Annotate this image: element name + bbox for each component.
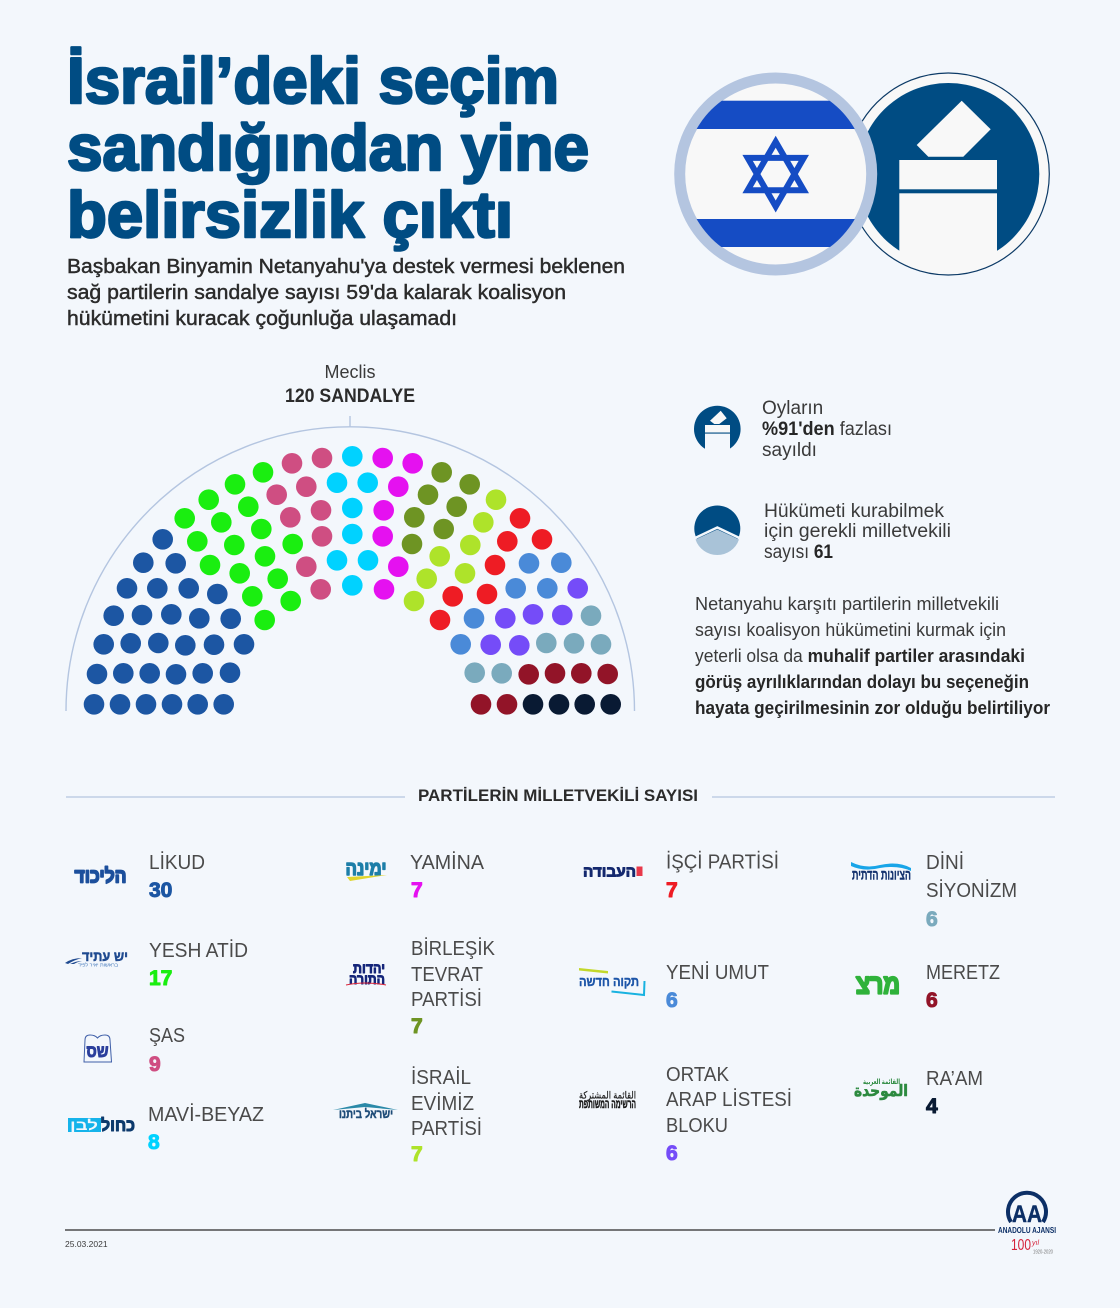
party: Labor: 7: [666, 879, 678, 902]
logo: Yamina: ימינה: [346, 858, 386, 880]
stat: votes counted: [762, 398, 892, 461]
party: Yisrael Beytenu: İSRAİL: [411, 1066, 471, 1089]
party: Meretz: [856, 962, 1000, 1012]
party: Ra'am: 4: [926, 1095, 938, 1118]
parliament label: [285, 362, 415, 407]
seats: Yesh Atid 17: [174, 462, 303, 630]
stat: votes counted: Oyların: [762, 398, 823, 419]
seats: Labor 7: [430, 508, 552, 630]
seats: Likud 30: [84, 529, 254, 715]
logo: United Torah Judaism: התורה: [349, 971, 385, 987]
title: [67, 44, 589, 251]
party: Joint List: 6: [666, 1142, 678, 1165]
stat: votes counted: sayıldı: [762, 440, 817, 461]
party: New Hope: YENİ UMUT: [666, 961, 769, 984]
icon: ballot box circle: [847, 73, 1049, 275]
party: New Hope: 6: [666, 989, 678, 1012]
party: Blue and White: MAVİ-BEYAZ: [148, 1103, 264, 1126]
party: Shas: 9: [149, 1053, 161, 1076]
logo: Anadolu Ajansi: yıl: [1031, 1240, 1039, 1247]
logo: United Torah Judaism: יהדות: [353, 960, 385, 976]
analysis paragraph: yeterli olsa da muhalif partiler arasındaki: [695, 646, 1025, 666]
party: Religious Zionism: [851, 851, 1017, 931]
icon: Israeli flag circle: [680, 78, 872, 270]
logo: Anadolu Ajansi: [998, 1193, 1056, 1256]
logo: Yisrael Beytenu: ישראל ביתנו: [339, 1107, 393, 1121]
title: belirsizlik çıktı: [67, 178, 513, 251]
subtitle: [67, 256, 625, 330]
party: Shas: ŞAS: [149, 1025, 185, 1047]
hemicycle seat chart: [66, 416, 634, 715]
party: United Torah Judaism: 7: [411, 1015, 423, 1038]
party: Ra'am: [854, 1068, 983, 1118]
subtitle: Başbakan Binyamin Netanyahu'ya destek vermesi beklenen: [67, 256, 625, 278]
party: Blue and White: 8: [148, 1131, 160, 1154]
stat: seats required: Hükümeti kurabilmek: [764, 501, 944, 522]
analysis paragraph: hayata geçirilmesinin zor olduğu belirtiliyor: [695, 698, 1050, 718]
footer rule and date: 25.03.2021: [65, 1239, 108, 1249]
logo: Likud: הליכוד: [74, 866, 126, 888]
logo: Religious Zionism: הציונות הדתית: [852, 866, 911, 882]
party: Yesh Atid: 17: [149, 967, 172, 990]
title: İsrail’deki seçim: [67, 44, 559, 117]
party: Likud: LİKUD: [149, 851, 205, 874]
stat: seats required: sayısı 61: [764, 542, 833, 563]
party: Meretz: MERETZ: [926, 962, 1000, 984]
subtitle: hükümetini kuracak çoğunluğa ulaşamadı: [67, 308, 457, 330]
party: Labor: İŞÇİ PARTİSİ: [666, 850, 779, 874]
party: Joint List: [579, 1064, 792, 1165]
party: United Torah Judaism: [346, 937, 496, 1038]
party: Yesh Atid: YESH ATİD: [149, 939, 248, 962]
seats: Religious Zionism 6: [464, 605, 611, 684]
party: Yisrael Beytenu: EVİMİZ: [411, 1092, 474, 1115]
seats: Shas 9: [266, 448, 332, 600]
icon: majority hemicycle: [693, 506, 742, 555]
party: Joint List: ARAP LİSTESİ: [666, 1088, 792, 1111]
logo: New Hope: [579, 968, 644, 995]
logo: Anadolu Ajansi: AA: [1012, 1201, 1042, 1228]
party: Ra'am: RA’AM: [926, 1068, 983, 1090]
logo: Anadolu Ajansi: 1920-2020: [1033, 1250, 1053, 1256]
subtitle: sağ partilerin sandalye sayısı 59'da kalarak koalisyon: [67, 282, 566, 304]
logo: Blue and White: [68, 1116, 135, 1135]
seats: United Torah Judaism 7: [402, 462, 480, 554]
party: Joint List: ORTAK: [666, 1064, 730, 1086]
party: Religious Zionism: 6: [926, 908, 938, 931]
seats: Yamina 7: [372, 448, 423, 600]
logo: Anadolu Ajansi: 100: [1011, 1237, 1031, 1254]
party: Joint List: BLOKU: [666, 1115, 728, 1137]
logo: Ra'am: القائمة العربية: [863, 1079, 900, 1086]
logo: Yesh Atid: [65, 948, 128, 968]
analysis paragraph: [695, 594, 1050, 718]
logo: Yisrael Beytenu: [333, 1103, 398, 1121]
logo: Yesh Atid: בראשות יאיר לפיד: [78, 962, 118, 968]
party: Religious Zionism: SİYONİZM: [926, 879, 1017, 902]
logo: Ra'am: الموحدة: [854, 1083, 908, 1100]
stat: seats required: için gerekli milletvekili: [764, 521, 951, 542]
party: Meretz: 6: [926, 989, 938, 1012]
seats: Ra'am 4: [523, 694, 621, 715]
party: Yamina: YAMİNA: [410, 851, 485, 874]
analysis paragraph: görüş ayrılıklarından dolayı bu seçeneğin: [695, 672, 1029, 692]
parliament label: Meclis: [324, 362, 376, 382]
logo: Labor: העבודה: [583, 864, 636, 880]
party: Yesh Atid: [65, 939, 248, 990]
logo: Joint List: הרשימה המשותפת: [579, 1097, 636, 1111]
analysis paragraph: sayısı koalisyon hükümetini kurmak için: [695, 620, 1006, 640]
title: sandığından yine: [67, 111, 589, 184]
party: Religious Zionism: DİNİ: [926, 851, 964, 874]
logo: Religious Zionism: [851, 862, 911, 882]
analysis paragraph: Netanyahu karşıtı partilerin milletvekili: [695, 594, 999, 614]
party: United Torah Judaism: TEVRAT: [411, 964, 483, 986]
logo: Shas: שס: [86, 1042, 109, 1061]
party: Likud: 30: [149, 879, 172, 902]
logo: Anadolu Ajansi: ANADOLU AJANSI: [998, 1225, 1056, 1235]
logo: United Torah Judaism: [346, 960, 386, 987]
party: Yisrael Beytenu: 7: [411, 1143, 423, 1166]
section heading: party seats: PARTİLERİN MİLLETVEKİLİ SAYISI: [418, 786, 698, 805]
party: Yamina: 7: [411, 879, 423, 902]
logo: New Hope: תקוה חדשה: [579, 974, 639, 989]
party: Likud: [74, 851, 205, 902]
logo: Blue and White: לבן: [70, 1117, 98, 1133]
icon: small ballot box: [694, 406, 741, 455]
party: Shas: [84, 1025, 185, 1076]
stat: seats required: [764, 501, 951, 563]
party: Yamina: [346, 851, 485, 902]
seats: Joint List 6: [480, 578, 588, 656]
seats: Yisrael Beytenu 7: [404, 489, 506, 611]
party: United Torah Judaism: BİRLEŞİK: [411, 937, 496, 960]
parliament label: 120 SANDALYE: [285, 386, 415, 407]
seats: Blue and White 8: [327, 446, 378, 596]
logo: Blue and White: כחול: [101, 1116, 135, 1135]
party: Yisrael Beytenu: [333, 1066, 482, 1166]
party: United Torah Judaism: PARTİSİ: [411, 988, 482, 1011]
party: Yisrael Beytenu: PARTİSİ: [411, 1117, 482, 1140]
seats: New Hope 6: [450, 552, 572, 655]
party: Blue and White: [68, 1103, 264, 1154]
logo: Meretz: מרצ: [856, 970, 900, 1000]
party: New Hope: [579, 961, 769, 1012]
seats: Meretz 6: [471, 663, 618, 715]
party: Labor: [583, 850, 779, 902]
logo: Joint List: [579, 1090, 636, 1111]
logo: Joint List: القائمة المشتركة: [579, 1090, 636, 1102]
stat: votes counted: %91'den fazlası: [762, 419, 892, 440]
logo: Yesh Atid: יש עתיד: [82, 948, 128, 964]
